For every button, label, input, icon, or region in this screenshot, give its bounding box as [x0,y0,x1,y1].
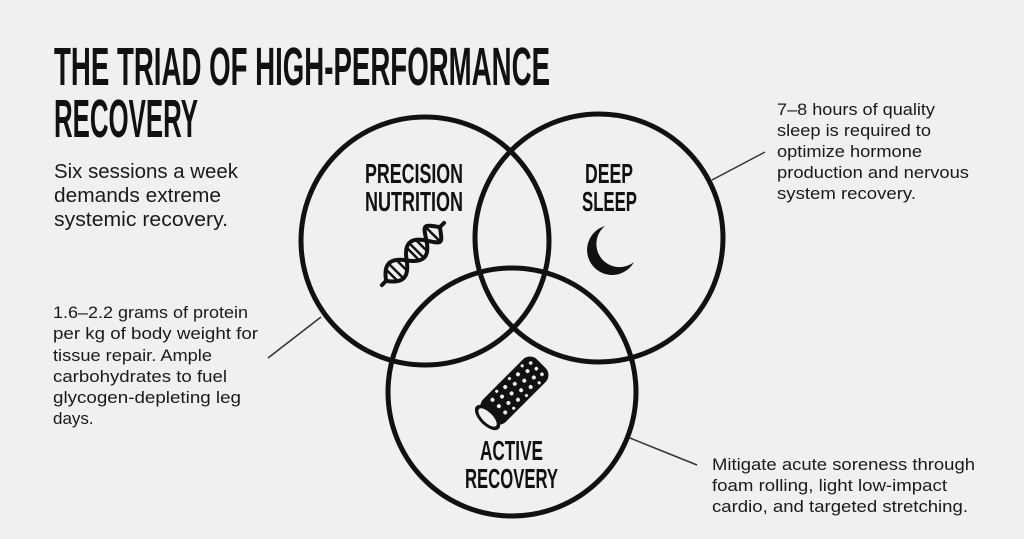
text block: nutrition detail: glycogen-depleting leg [53,388,241,407]
title: RECOVERY [54,89,198,149]
text block: active recovery detail [712,455,975,516]
subtitle: demands extreme [54,185,221,207]
label: active recovery: ACTIVE [480,435,543,466]
label: active recovery [465,435,558,494]
label: precision nutrition [365,158,463,217]
text block: sleep detail: sleep is required to [777,121,931,140]
text block: nutrition detail: carbohydrates to fuel [53,367,227,386]
label: precision nutrition: NUTRITION [365,186,463,217]
text block: nutrition detail [53,303,258,428]
text block: active recovery detail: cardio, and targeted stretching. [712,497,968,516]
subtitle: systemic recovery. [54,209,228,231]
venn diagram circles [301,114,723,516]
title [54,37,550,149]
text block: sleep detail: system recovery. [777,184,916,203]
label: active recovery: RECOVERY [465,463,558,494]
text block: nutrition detail: tissue repair. Ample [53,346,212,365]
text block: sleep detail: optimize hormone [777,142,922,161]
text block: sleep detail: production and nervous [777,163,969,182]
text block: active recovery detail: Mitigate acute soreness through [712,455,975,474]
text block: nutrition detail: per kg of body weight for [53,324,258,343]
icon: moon [587,226,634,275]
label: deep sleep [582,158,637,217]
connector: active recovery [630,438,697,465]
title: THE TRIAD OF HIGH-PERFORMANCE [54,37,550,97]
label: precision nutrition: PRECISION [365,158,463,189]
label: deep sleep: SLEEP [582,186,637,217]
connector: sleep [712,152,765,180]
connector: nutrition [268,317,321,358]
text block: nutrition detail: days. [53,409,94,428]
text block: sleep detail [777,100,969,203]
label: deep sleep: DEEP [585,158,633,189]
subtitle [54,161,239,231]
icon: foam roller [471,352,553,434]
text block: sleep detail: 7–8 hours of quality [777,100,936,119]
icon: dna [374,215,452,293]
subtitle: Six sessions a week [54,161,239,183]
text block: active recovery detail: foam rolling, light low-impact [712,476,947,495]
text block: nutrition detail: 1.6–2.2 grams of protein [53,303,248,322]
